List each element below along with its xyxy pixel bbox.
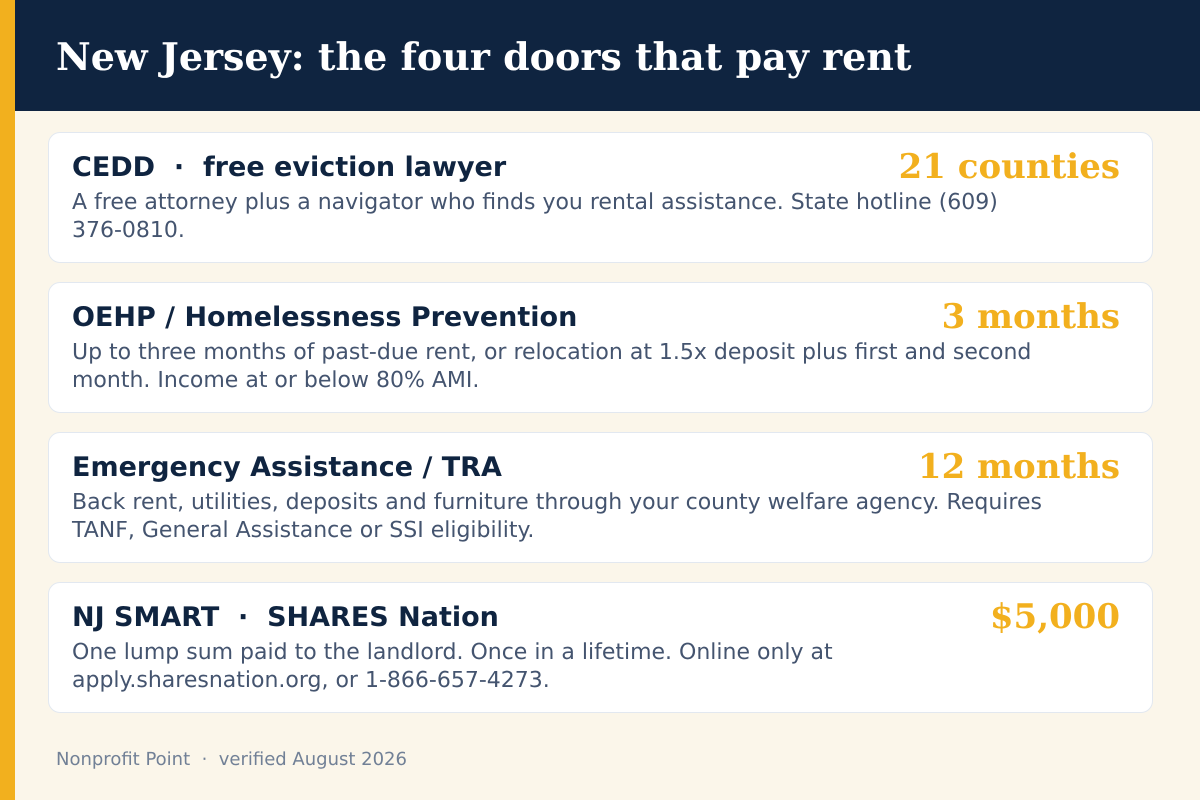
card heading: Emergency Assistance: Emergency Assistance / TRA [72,452,502,483]
card text: NJ SMART [72,640,833,693]
panel: OEHP [48,282,1153,413]
panel: NJ SMART [48,582,1153,713]
stat: 3 months: 3 months [942,297,1120,337]
card text: CEDD [72,190,998,243]
card text: CEDD: 376-0810. [72,218,185,243]
header band [15,0,1200,111]
card text: Emergency Assistance: Back rent, utilities, deposits and furniture through your county welfare agency. Requires [72,490,1042,515]
card text: OEHP: month. Income at or below 80% AMI. [72,368,479,393]
stat: 12 months: 12 months [918,447,1120,487]
accent bar [0,0,15,800]
stat: 21 counties: 21 counties [899,147,1120,187]
card text: Emergency Assistance [72,490,1042,543]
title: New Jersey: the four doors that pay rent [56,34,911,79]
panel: CEDD [48,132,1153,263]
card text: Emergency Assistance: TANF, General Assistance or SSI eligibility. [72,518,534,543]
card heading: OEHP: OEHP / Homelessness Prevention [72,302,577,333]
stat: $5,000: $5,000 [990,597,1120,637]
footer credit: Nonprofit Point · verified August 2026 [56,749,407,770]
card text: NJ SMART: One lump sum paid to the landlord. Once in a lifetime. Online only at [72,640,833,665]
card text: OEHP [72,340,1031,393]
card heading: NJ SMART: NJ SMART · SHARES Nation [72,602,499,633]
card text: OEHP: Up to three months of past-due rent, or relocation at 1.5x deposit plus first and second [72,340,1031,365]
card heading: CEDD: CEDD · free eviction lawyer [72,152,506,183]
panel: Emergency Assistance [48,432,1153,563]
card text: NJ SMART: apply.sharesnation.org, or 1-866-657-4273. [72,668,550,693]
card text: CEDD: A free attorney plus a navigator who finds you rental assistance. State hotline (609) [72,190,998,215]
